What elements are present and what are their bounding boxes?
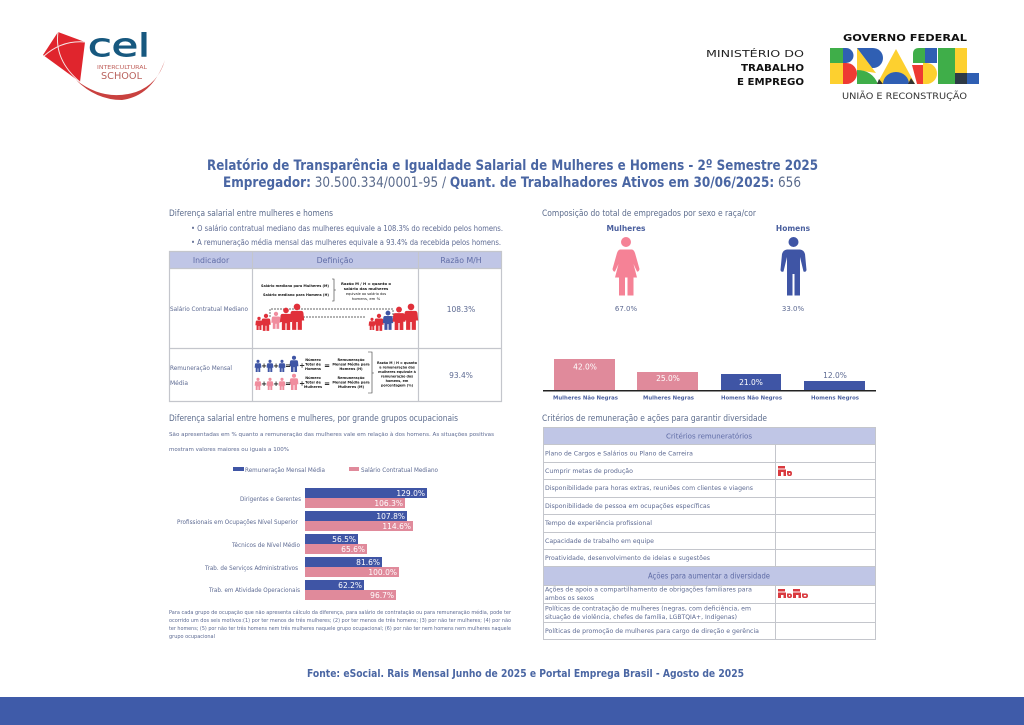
text block: footnote: ocorrido um dos seis motivos:(1) por ter menos de três mulheres; (2) por ter menos de três homens; (3) por não ter mulheres; (4) por não	[169, 617, 511, 624]
heading: diferença por grupos ocupacionais: Diferença salarial entre homens e mulheres, por grande grupos ocupacionais	[169, 414, 458, 424]
text block: footnote	[169, 609, 512, 640]
bar chart: occupational groups: Trab. de Serviços Administrativos	[204, 565, 298, 572]
chart legend: Remuneração Mensal Média	[245, 467, 325, 474]
diagram: average pay definition: Remuneração	[337, 358, 365, 362]
column chart: sex and race: 25.0%	[656, 374, 680, 383]
diagram: average pay definition: Mensal Média para	[332, 380, 370, 384]
bar chart: occupational groups: Dirigentes e Gerentes	[240, 496, 301, 503]
logo: Governo Federal Brasil: UNIÃO E RECONSTRUÇÃO	[842, 91, 967, 102]
column chart: sex and race: 21.0%	[739, 378, 763, 387]
footer bar	[0, 697, 1024, 725]
icon: woman 67.0%: 67.0%	[615, 305, 637, 313]
bar chart: occupational groups: 62.2%	[338, 581, 362, 590]
logo: CEL Intercultural School: SCHOOL	[101, 71, 142, 82]
diagram: median salary definition: Salário mediano para Mulheres (M)	[261, 283, 329, 288]
heading: critérios: Critérios de remuneração e ações para garantir diversidade	[542, 413, 767, 424]
diagram: average pay definition: Total de	[305, 362, 321, 366]
diagram: average pay definition: ÷	[299, 362, 305, 370]
logo: Ministério do Trabalho e Emprego	[706, 47, 804, 88]
diagram: average pay definition: homens, em	[386, 379, 409, 383]
column chart: sex and race	[543, 359, 876, 402]
diagram: average pay definition: +	[273, 380, 279, 388]
column chart: sex and race: Mulheres Não Negras	[553, 396, 619, 402]
bar chart: occupational groups: 129.0%	[396, 489, 425, 498]
text block: chart description	[169, 431, 494, 453]
title	[207, 158, 818, 191]
icon: marker family support actions	[778, 589, 808, 598]
diagram: average pay definition	[255, 352, 418, 393]
diagram: average pay definition: =	[324, 380, 330, 388]
panel: criteria table: Políticas de promoção de mulheres para cargo de direção e gerência	[545, 627, 759, 635]
panel: indicator table: Remuneração Mensal	[170, 365, 232, 372]
bar chart: occupational groups: 114.6%	[382, 522, 411, 531]
panel: indicator table: 108.3%	[447, 305, 475, 314]
panel: criteria table: situação de violência, chefes de família, LGBTQIA+, Indígenas)	[545, 613, 737, 621]
column chart: sex and race: Mulheres Negras	[643, 396, 695, 402]
diagram: average pay definition: Número	[305, 376, 321, 380]
heading: diferença salarial: Diferença salarial entre mulheres e homens	[169, 209, 333, 219]
diagram: average pay definition: Mulheres (M)	[338, 385, 364, 389]
diagram: average pay definition: ÷	[299, 380, 305, 388]
column chart: sex and race: 42.0%	[573, 362, 597, 372]
panel: criteria table: Políticas de contratação de mulheres (negras, com deficiência, em	[545, 604, 751, 612]
icon: woman 67.0%	[606, 224, 646, 313]
logo: Governo Federal Brasil: GOVERNO FEDERAL	[843, 33, 968, 44]
panel: criteria table: Disponibilidade de pessoa em ocupações específicas	[545, 502, 711, 510]
icon: man 33.0%	[776, 224, 811, 313]
diagram: average pay definition: +	[273, 362, 279, 370]
logo: Ministério do Trabalho e Emprego: MINISTÉRIO DO	[706, 47, 804, 60]
logo: CEL Intercultural School: INTERCULTURAL	[97, 65, 148, 71]
bar chart: occupational groups: 107.8%	[376, 512, 405, 521]
logo: Ministério do Trabalho e Emprego: TRABALHO	[741, 63, 804, 74]
panel: indicator table: Definição	[317, 256, 354, 265]
diagram: average pay definition: Mulheres	[304, 385, 322, 389]
diagram: average pay definition: +	[261, 380, 267, 388]
diagram: median salary definition: homens, em %	[352, 296, 381, 301]
logo: CEL Intercultural School: cel	[88, 28, 150, 64]
icon: man 33.0%: 33.0%	[782, 305, 804, 313]
bar chart: occupational groups	[177, 488, 427, 600]
diagram: median salary definition: salário das mulheres	[344, 286, 389, 291]
logo: CEL Intercultural School	[43, 28, 165, 100]
icon: woman 67.0%: Mulheres	[606, 224, 646, 233]
diagram: average pay definition: Homens	[305, 367, 321, 371]
diagram: median salary definition: equivale ao salário dos	[346, 292, 386, 296]
diagram: average pay definition: =	[285, 380, 291, 388]
text block: chart description: mostram valores maiores ou iguais a 100%	[169, 447, 289, 453]
text block: footnote: grupo ocupacional	[169, 634, 215, 640]
panel: indicator table: Indicador	[193, 256, 230, 265]
panel: criteria table: Ações para aumentar a diversidade	[648, 572, 770, 580]
diagram: average pay definition: Total de	[305, 380, 321, 384]
diagram: average pay definition: a remuneração das	[379, 366, 415, 370]
panel: criteria table: Plano de Cargos e Salários ou Plano de Carreira	[545, 450, 693, 458]
icon: man 33.0%: Homens	[776, 224, 811, 233]
diagram: average pay definition: remuneração dos	[381, 374, 413, 378]
panel: indicator table: 93.4%	[449, 371, 473, 380]
bar chart: occupational groups: 96.7%	[370, 591, 394, 600]
bar chart: occupational groups: 81.6%	[356, 558, 380, 567]
diagram: average pay definition: Mensal Média para	[332, 362, 370, 366]
diagram: median salary definition: Salário mediano para Homens (H)	[263, 292, 329, 297]
column chart: sex and race: Homens Não Negros	[721, 396, 783, 402]
bar chart: occupational groups: 100.0%	[368, 568, 397, 577]
panel: criteria table: Capacidade de trabalho em equipe	[545, 537, 654, 545]
panel: criteria table: Ações de apoio a compartilhamento de obrigações familiares para	[545, 586, 752, 594]
diagram: average pay definition: Homens (H)	[339, 367, 363, 371]
bar chart: occupational groups: Técnicos de Nível Médio	[231, 542, 300, 549]
diagram: average pay definition: mulheres equivale à	[378, 370, 416, 374]
diagram: median salary definition: Razão M / H = quanto o	[341, 281, 391, 286]
diagram: average pay definition: Razão M / H = quanto	[377, 361, 418, 365]
diagram: average pay definition: +	[261, 362, 267, 370]
panel: indicator table: Média	[170, 380, 188, 387]
diagram: average pay definition: =	[324, 362, 330, 370]
source line: Fonte: eSocial. Rais Mensal Junho de 2025 e Portal Emprega Brasil - Agosto de 2025	[307, 668, 744, 680]
text block: footnote: ter homens; (5) por não ter três homens nem três mulheres naquele grupo ocupacional; (6) por não ter nem homens nem mulheres naquele	[169, 625, 511, 632]
panel: indicator table: Salário Contratual Mediano	[170, 306, 248, 313]
panel: criteria table: Proatividade, desenvolvimento de ideias e sugestões	[545, 554, 711, 562]
bar chart: occupational groups: 106.3%	[374, 499, 403, 508]
diagram: average pay definition: Remuneração	[337, 376, 365, 380]
title: Relatório de Transparência e Igualdade Salarial de Mulheres e Homens - 2º Semestre 2025	[207, 158, 818, 174]
chart legend	[233, 467, 438, 474]
diagram: average pay definition: =	[285, 362, 291, 370]
icon: marker production targets	[778, 466, 792, 476]
text block: footnote: Para cada grupo de ocupação que não apresenta cálculo da diferença, para salário de contratação ou para remuneração média, pode ter	[169, 609, 512, 616]
panel: indicator table: Razão M/H	[440, 256, 482, 265]
bar chart: occupational groups: 65.6%	[341, 545, 365, 554]
bar chart: occupational groups: Trab. em Atividade Operacionais	[208, 587, 300, 594]
diagram: average pay definition: porcentagem (%)	[381, 384, 414, 388]
title: Empregador: 30.500.334/0001-95 / Quant. de Trabalhadores Ativos em 30/06/2025: 656	[223, 175, 801, 191]
panel: criteria table: Disponibilidade para horas extras, reuniões com clientes e viagens	[545, 484, 754, 492]
heading: composição: Composição do total de empregados por sexo e raça/cor	[542, 209, 756, 219]
text block: key findings	[191, 224, 503, 247]
logo: Governo Federal Brasil	[830, 33, 979, 102]
text block: chart description: São apresentadas em % quanto a remuneração das mulheres vale em relação à dos homens. As situações positivas	[169, 431, 494, 438]
panel: criteria table: Cumprir metas de produção	[545, 467, 633, 475]
bar chart: occupational groups: Profissionais em Ocupações Nível Superior	[177, 519, 298, 526]
panel: criteria table: Critérios remuneratórios	[666, 432, 752, 440]
text block: key findings: • A remuneração média mensal das mulheres equivale a 93.4% da recebida pelos homens.	[191, 237, 501, 247]
chart legend: Salário Contratual Mediano	[361, 467, 438, 474]
column chart: sex and race: 12.0%	[823, 371, 847, 380]
logo: Ministério do Trabalho e Emprego: E EMPREGO	[737, 77, 804, 88]
panel: indicator table	[169, 251, 502, 402]
diagram: median salary definition	[255, 279, 418, 331]
panel: criteria table: ambos os sexos	[545, 594, 595, 602]
diagram: average pay definition: Número	[305, 358, 321, 362]
column chart: sex and race: Homens Negros	[811, 396, 860, 402]
bar chart: occupational groups: 56.5%	[332, 535, 356, 544]
text block: key findings: • O salário contratual mediano das mulheres equivale a 108.3% do recebido pelos homens.	[191, 224, 503, 233]
panel: criteria table: Tempo de experiência profissional	[544, 519, 652, 527]
panel: criteria table	[543, 427, 876, 640]
